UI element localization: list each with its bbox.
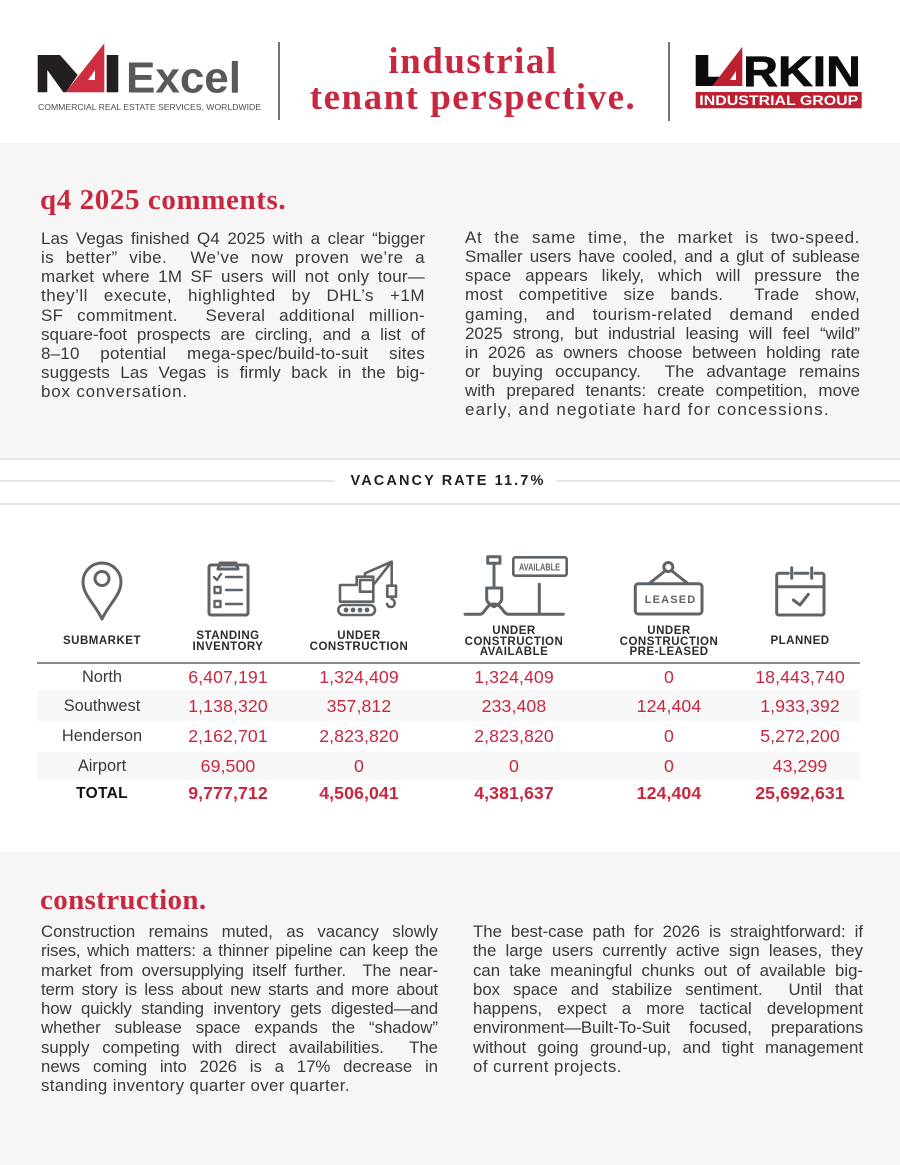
text block: comments left column: is better” vibe. We’ve now proven we’re a [41, 248, 425, 267]
column header: under construction available [465, 625, 563, 658]
row: Airport: 0 [354, 756, 364, 776]
row: Airport: 0 [664, 756, 674, 776]
text block: comments left column: box conversation. [41, 382, 188, 401]
icon: leased sign: LEASED [645, 594, 695, 606]
row: Henderson [62, 726, 840, 746]
text block: comments right column: early, and negotiate hard for concessions. [465, 400, 830, 419]
logo: Larkin Industrial Group: RKIN [743, 48, 861, 96]
row: North: 18,443,740 [755, 667, 845, 687]
column header: standing inventory [193, 630, 263, 653]
icon: clipboard checklist [208, 562, 250, 616]
column header: standing inventory: STANDING [196, 630, 260, 642]
text block: construction left column: market from oversupplying itself further. The near- [41, 960, 438, 980]
logo: Larkin Industrial Group: INDUSTRIAL GROUP [699, 93, 858, 108]
row: TOTAL: 9,777,712 [188, 783, 268, 803]
table header [37, 625, 860, 664]
text block: comments left column: SF commitment. Several additional million- [41, 306, 425, 325]
row: Henderson: 2,823,820 [474, 726, 554, 746]
text block: construction left column: term story is less about new starts and more about [41, 980, 438, 999]
row: Southwest: Southwest [64, 697, 140, 715]
text block: comments right column [465, 228, 860, 419]
row: North: 1,324,409 [319, 667, 399, 687]
row: North: 6,407,191 [188, 667, 268, 687]
logo: NAI Excel: Excel [126, 54, 241, 102]
logo: NAI Excel: COMMERCIAL REAL ESTATE SERVICES, WORLDWIDE [38, 103, 262, 112]
text block: comments right column: space appears likely, which will pressure the [465, 266, 860, 285]
column header: submarket: SUBMARKET [63, 635, 141, 647]
text block: comments right column: in 2026 as owners choose between holding rate [465, 343, 860, 362]
text block: construction left column: Construction remains muted, as vacancy slowly [41, 922, 438, 941]
row: Henderson: 0 [664, 726, 674, 746]
row: TOTAL: 25,692,631 [755, 783, 845, 803]
text block: construction left column: how quickly standing inventory gets digested—and [41, 999, 438, 1018]
text block: construction right column: can take meaningful chunks out of available big- [473, 960, 863, 980]
row: Airport: 43,299 [773, 756, 827, 776]
icon: map pin [82, 562, 122, 620]
column header: under construction available: UNDER [492, 625, 536, 637]
row: Airport: 0 [509, 756, 519, 776]
row: Southwest: 233,408 [482, 696, 546, 716]
label: vacancy rate: VACANCY RATE 11.7% [351, 473, 545, 489]
text block: comments left column [41, 229, 425, 401]
logo: NAI Excel [38, 43, 262, 112]
text block: comments right column: 2025 strong, but industrial leasing will feel “wild” [465, 324, 860, 343]
icon: calendar [775, 566, 826, 616]
row: North [82, 667, 845, 687]
panel: q4 2025 comments [0, 143, 900, 459]
column header: standing inventory: INVENTORY [193, 641, 263, 653]
row: Southwest [37, 690, 860, 721]
text block: construction right column: without going ground-up, and tight management [473, 1038, 863, 1056]
column header: under construction: CONSTRUCTION [310, 641, 408, 653]
icon: shovel with available sign [464, 555, 568, 616]
title: tenant perspective. [310, 77, 636, 118]
text block: construction left column: supply competing with direct availabilities. The [41, 1038, 438, 1056]
row: North: 0 [664, 667, 674, 687]
text block: comments right column: with prepared tenants: create competition, move [465, 381, 860, 400]
text block: comments left column: square-foot prospects are circling, and a list of [41, 325, 425, 344]
heading: construction: construction. [40, 884, 206, 916]
row: Southwest: 1,933,392 [760, 696, 840, 716]
heading: q4 2025 comments: q4 2025 comments. [40, 184, 286, 216]
logo: Larkin Industrial Group [696, 46, 862, 108]
row: North: 1,324,409 [474, 667, 554, 687]
divider: right header [668, 42, 670, 121]
text block: construction right column: The best-case path for 2026 is straightforward: if [473, 922, 863, 941]
row: Airport [37, 752, 860, 780]
text block: comments right column: or buying occupancy. The advantage remains [465, 362, 860, 381]
text block: construction right column: environment—Built-To-Suit focused, preparations [473, 1018, 863, 1037]
column header: under construction pre-leased: CONSTRUCTION [620, 636, 718, 648]
row: Henderson: 5,272,200 [760, 726, 840, 746]
row: Airport: 69,500 [201, 756, 255, 776]
text block: construction right column [473, 922, 864, 1076]
text block: construction right column: of current projects. [473, 1057, 622, 1076]
row: Airport: Airport [78, 757, 126, 775]
row: TOTAL [76, 783, 845, 803]
text block: construction right column: box space and stabilize sentiment. Until that [473, 980, 863, 999]
column header: under construction: UNDER [337, 630, 381, 642]
title [310, 41, 636, 118]
text block: comments right column: Smaller users have cooled, and a glut of sublease [465, 247, 860, 266]
row: TOTAL: 4,506,041 [319, 783, 399, 803]
text block: comments left column: they’ll execute, highlighted by DHL’s +1M [41, 286, 425, 305]
text block: comments left column: suggests Las Vegas is firmly back in the big- [41, 363, 425, 382]
divider: left header [278, 42, 280, 120]
text block: construction left column: news coming into 2026 is a 17% decrease in [41, 1057, 438, 1076]
text block: comments right column: most competitive size bands. Trade show, [465, 285, 860, 304]
row: Southwest: 124,404 [637, 696, 701, 716]
row: TOTAL: 124,404 [637, 783, 701, 803]
row: Henderson: 2,823,820 [319, 726, 399, 746]
row: Henderson: Henderson [62, 727, 142, 745]
panel: construction [0, 852, 900, 1165]
column header: under construction available: CONSTRUCTION [465, 636, 563, 648]
text block: construction right column: the large users currently active sign leases, they [473, 941, 863, 960]
text block: construction right column: happens, expect a more tactical development [473, 999, 863, 1018]
row: Southwest: 1,138,320 [188, 696, 268, 716]
row: TOTAL: 4,381,637 [474, 783, 554, 803]
text block: construction left column: rises, which matters: a thinner pipeline can keep the [41, 941, 438, 960]
column header: under construction [310, 630, 408, 653]
text block: construction left column: standing inventory quarter over quarter. [41, 1076, 350, 1095]
text block: construction left column: whether sublease space expands the “shadow” [41, 1018, 438, 1037]
text block: comments right column: gaming, and tourism-related demand ended [465, 305, 860, 324]
icon: leased sign [634, 561, 704, 616]
text block: construction left column [41, 922, 438, 1095]
column header: under construction pre-leased: UNDER [647, 625, 691, 637]
text block: comments right column: At the same time, the market is two-speed. [465, 228, 860, 247]
text block: comments left column: market where 1M SF users will not only tour— [41, 267, 425, 286]
row: Southwest: 357,812 [327, 696, 391, 716]
column header: under construction pre-leased: PRE-LEASED [629, 646, 709, 658]
column header: under construction pre-leased [620, 625, 718, 658]
row: North: North [82, 668, 122, 686]
title: industrial [388, 41, 558, 82]
column header: under construction available: AVAILABLE [480, 646, 548, 658]
column header: planned: PLANNED [770, 635, 830, 647]
text block: comments left column: Las Vegas finished Q4 2025 with a clear “bigger [41, 229, 425, 248]
row: Henderson: 2,162,701 [188, 726, 268, 746]
row: TOTAL: TOTAL [76, 785, 128, 802]
text block: comments left column: 8–10 potential mega-spec/build-to-suit sites [41, 344, 425, 363]
icon: crane [337, 560, 398, 616]
